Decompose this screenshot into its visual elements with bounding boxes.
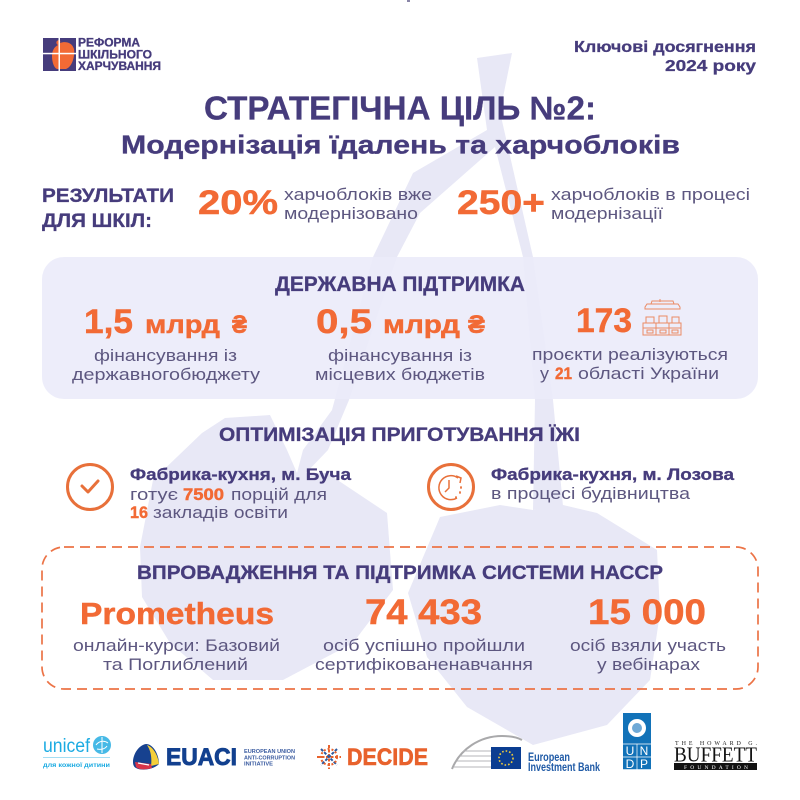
stat: Prometheus [73,596,280,674]
Lozova text [491,466,735,503]
Bucha text: порцій для [231,485,327,504]
logo: DECIDE [317,744,428,771]
icon: kitchen equipment [643,299,681,335]
results heading: РЕЗУЛЬТАТИ [42,185,174,207]
logo: Howard G. Buffett Foundation: BUFFETT [674,742,757,766]
stat: 1.5 billion: млрд [145,311,220,339]
results for schools [42,184,750,232]
small top mark [407,0,410,2]
stat: 1.5 billion: фінансування із [94,346,237,365]
logo: unicef [43,736,111,769]
left cherry [140,415,393,680]
stat: Prometheus: та Поглиблений [103,655,248,674]
heading: food preparation optimisation: ОПТИМІЗАЦІЯ ПРИГОТУВАННЯ ЇЖІ [219,425,580,446]
results heading [42,185,174,232]
right cherry [408,505,660,745]
stat: 20 percent: модернізовано [284,204,418,223]
stat: 0.5 billion: млрд [383,311,460,339]
logo: EUACI: INITIATIVE [244,762,274,768]
stat: 20 percent: 20% [198,184,278,222]
header note: key achievements: Ключові досягнення [574,39,756,56]
logo: EUACI: EUACI [166,744,237,771]
stat: 15 000: 15 000 [588,593,706,632]
stat: 173 projects: 21 [555,364,572,383]
logo: European Investment Bank: European [528,752,570,764]
stat: 250 plus [457,184,750,223]
stat: 1.5 billion: ₴ [232,311,247,339]
stat: 74 433: 74 433 [365,593,482,632]
stat: 173 projects: у [540,364,550,383]
logo: UNDP [623,713,651,771]
icon: clock [428,464,474,510]
Bucha text: Фабрика-кухня, м. Буча [130,466,352,484]
logo: European Investment Bank: Investment Bank [528,762,600,774]
stat: 250 plus: харчоблоків в процесі [551,185,750,204]
logo: unicef: для кожної дитини [43,762,110,769]
title: СТРАТЕГІЧНА ЦІЛЬ №2: [204,90,596,126]
stat: 20 percent: харчоблоків вже [284,185,432,204]
stat: 1.5 billion: державногобюджету [72,365,261,384]
results heading: ДЛЯ ШКІЛ: [42,210,152,232]
logo: UNDP: U [626,744,634,758]
stat: 250 plus: 250+ [457,184,545,222]
stat: 20 percent [198,184,432,223]
logo: unicef: unicef [43,736,91,757]
stat: 0.5 billion: ₴ [468,311,485,339]
panel heading: ДЕРЖАВНА ПІДТРИМКА [275,273,525,296]
panel heading: ВПРОВАДЖЕННЯ ТА ПІДТРИМКА СИСТЕМИ НАССР [137,562,663,584]
title [121,90,680,160]
stat: 173 projects: проєкти реалізуються [532,345,728,364]
logo: EUACI: EUROPEAN UNION [244,749,295,755]
item: Lozova factory kitchen [428,464,735,510]
stat: 0.5 billion: місцевих бюджетів [315,365,485,384]
stat: Prometheus: онлайн-курси: Базовий [73,636,280,655]
stat: 0.5 billion: 0,5 [316,303,372,341]
stat: 15 000: у вебінарах [597,655,701,674]
stat: 1.5 billion: 1,5 [84,303,133,341]
stat: 1.5 billion [72,303,261,384]
logo: European Investment Bank [452,736,600,774]
Bucha text [130,466,352,522]
logo: Howard G. Buffett Foundation: THE HOWARD G. [675,741,758,747]
background: cherry illustration [140,53,660,745]
item: Bucha factory kitchen [68,464,352,522]
logo: UNDP: P [640,757,648,771]
Lozova text: в процесі будівництва [491,484,691,503]
panel: HACCP system [42,547,758,689]
stat: 74 433: осіб успішно пройшли [323,636,525,655]
logo: UNDP: D [626,757,635,771]
logo: EUACI: ANTI-CORRUPTION [244,756,295,762]
panel: state support [42,257,758,399]
cherry stems [297,53,563,510]
stat: 74 433: сертифікованенавчання [315,655,533,674]
logo: DECIDE: DECIDE [347,744,428,771]
title: Модернізація їдалень та харчоблоків [121,130,680,160]
stat: 74 433 [315,593,533,674]
icon: check mark [68,464,112,510]
header note: key achievements: 2024 року [665,58,756,75]
stat: 173 projects: 173 [576,302,632,340]
stat: 0.5 billion: фінансування із [328,346,472,365]
stat: Prometheus: Prometheus [80,596,274,631]
logo: school meals reform [43,38,161,73]
stat: 173 projects [532,302,728,383]
Bucha text: 7500 [183,485,224,504]
logo: school meals reform: РЕФОРМА [78,38,140,50]
stat: 15 000 [570,593,726,674]
logo: UNDP: N [640,744,648,758]
logo: school meals reform: ХАРЧУВАННЯ [78,61,161,73]
Lozova text: Фабрика-кухня, м. Лозова [491,466,735,484]
stat: 250 plus: модернізації [551,204,663,223]
Bucha text: закладів освіти [153,503,288,522]
header note: key achievements [574,39,756,75]
Bucha text: 16 [130,503,148,522]
Bucha text: готує [130,485,178,504]
logo: EUACI [133,744,295,771]
stat: 15 000: осіб взяли участь [570,636,726,655]
stat: 173 projects: області України [578,364,719,383]
logo: school meals reform: ШКІЛЬНОГО [78,50,152,62]
stat: 0.5 billion [315,303,485,384]
logo: Howard G. Buffett Foundation: FOUNDATION [684,765,748,771]
